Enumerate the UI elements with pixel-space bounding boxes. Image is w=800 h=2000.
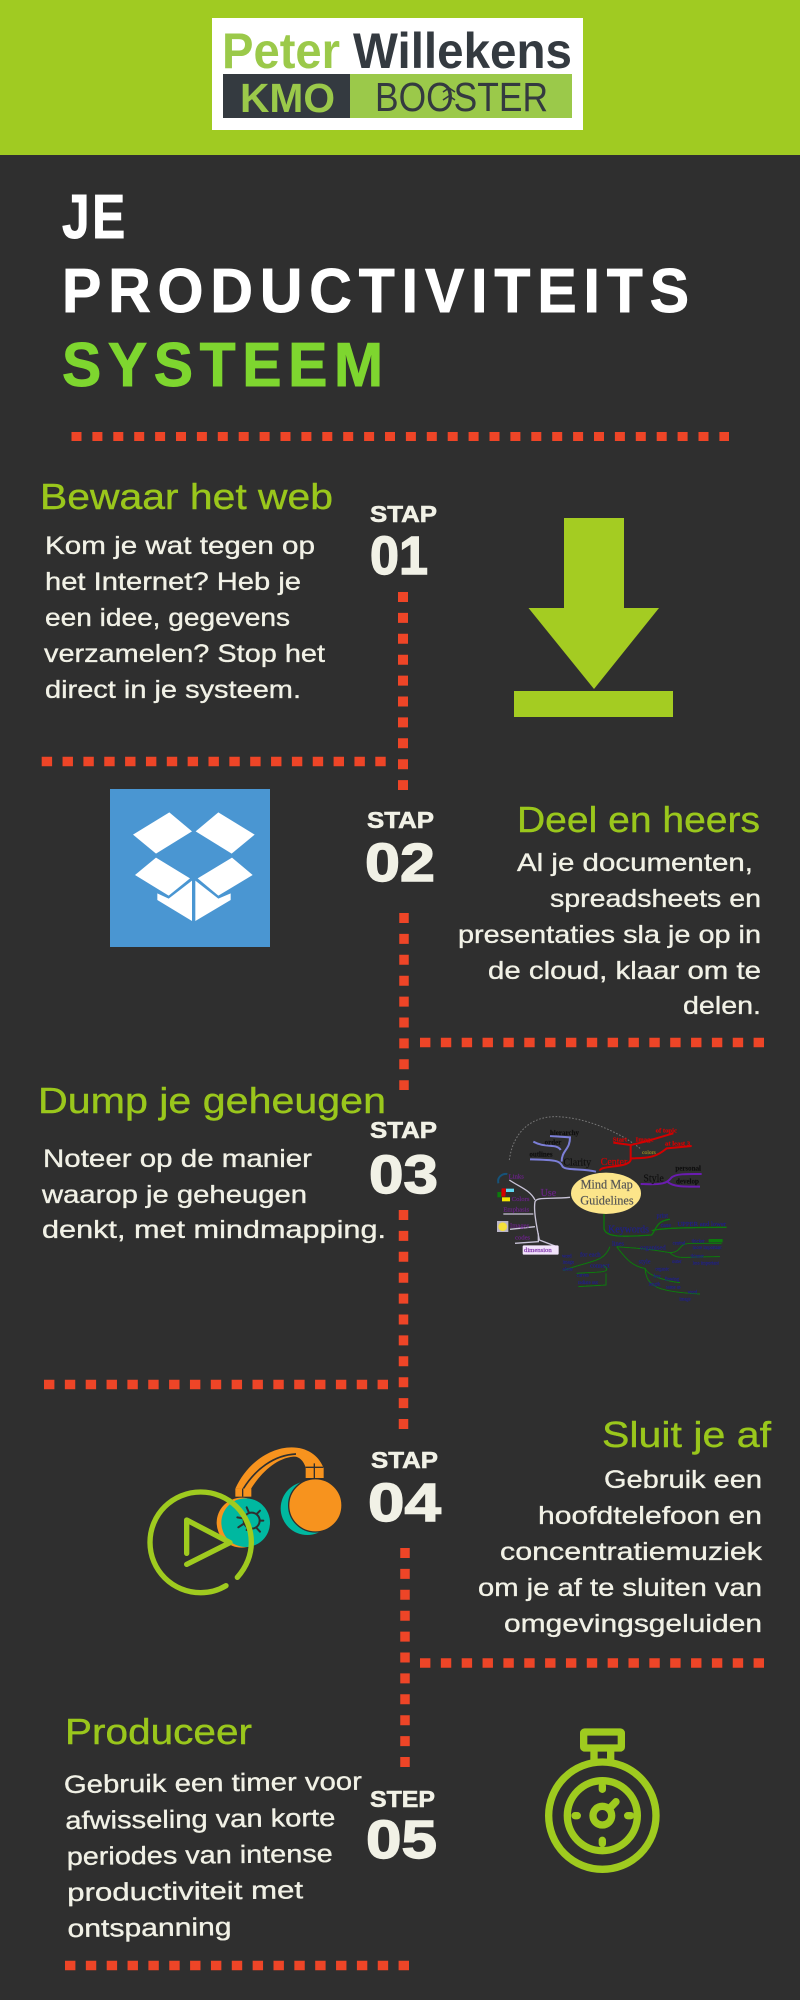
logo: Peter Willekens KMO Booster: Willekens: [353, 23, 572, 79]
text block: step 1 body: het Internet? Heb je: [45, 568, 301, 596]
chart: mind map guidelines: style: [639, 1259, 651, 1266]
chart: mind map guidelines: alone: [563, 1268, 573, 1273]
title: PRODUCTIVITEITS: [62, 256, 689, 325]
text block: step 5 body: ontspanning: [67, 1913, 232, 1943]
chart: mind map guidelines: free: [653, 1274, 661, 1279]
chart: mind map guidelines: codes: [515, 1234, 531, 1241]
step label 04: 04: [368, 1473, 441, 1533]
step label 02: [365, 807, 435, 893]
chart: mind map guidelines: personal: [675, 1164, 701, 1172]
step label 04: STAP: [371, 1447, 438, 1473]
step label 05: [366, 1786, 437, 1870]
text block: step 4 body: om je af te sluiten van: [478, 1574, 762, 1602]
chart: mind map guidelines: Emphasis: [503, 1207, 530, 1214]
text block: step 4 body: concentratiemuziek: [500, 1538, 763, 1566]
chart: mind map guidelines: thinner: [691, 1255, 704, 1260]
chart: mind map guidelines: curves: [577, 1273, 589, 1278]
text block: step 4 body: hoofdtelefoon en: [538, 1502, 762, 1530]
text block: step 5 body: Gebruik een timer voor: [64, 1768, 362, 1799]
logo: Peter Willekens KMO Booster: KMO: [240, 75, 335, 121]
chart: mind map guidelines: Image: [636, 1136, 653, 1143]
chart: mind map guidelines: develop: [676, 1178, 699, 1186]
step label 02: STAP: [367, 807, 434, 833]
chart: mind map guidelines: Center: [601, 1157, 628, 1168]
chart: mind map guidelines: length: [649, 1283, 661, 1288]
step label 02: 02: [365, 833, 435, 893]
icon: dropbox: [110, 789, 270, 947]
chart: mind map guidelines: same as: [666, 1286, 681, 1291]
step label 03: STAP: [370, 1117, 437, 1143]
chart: mind map guidelines: Colors: [512, 1196, 530, 1203]
text block: step 2 body: de cloud, klaar om te: [488, 957, 761, 985]
heading: Bewaar het web: Bewaar het web: [40, 476, 333, 517]
chart: mind map guidelines: radiate out: [578, 1281, 598, 1286]
text block: step 4 body: omgevingsgeluiden: [504, 1610, 762, 1638]
step label 03: 03: [369, 1145, 438, 1205]
chart: mind map guidelines: connect: [590, 1263, 610, 1270]
title: JE: [62, 182, 125, 251]
panel: step 4: [150, 1414, 772, 1638]
chart: mind map guidelines: dimension: [524, 1247, 552, 1254]
header band: [0, 0, 800, 155]
logo: Peter Willekens KMO Booster: BOOSTER: [375, 74, 548, 120]
heading: Sluit je af: Sluit je af: [602, 1414, 772, 1455]
chart: mind map guidelines: outlines: [529, 1151, 553, 1159]
step label 01: STAP: [370, 501, 437, 527]
panel: step 1: [40, 476, 673, 717]
chart: mind map guidelines: hierarchy: [550, 1129, 579, 1137]
chart: mind map guidelines: Keywords: [608, 1225, 649, 1236]
chart: mind map guidelines: word: [688, 1290, 698, 1295]
chart: mind map guidelines: Images: [510, 1222, 530, 1229]
text block: step 5 body: periodes van intense: [67, 1840, 333, 1871]
chart: mind map guidelines: of topic: [656, 1128, 677, 1135]
panel: step 3: [38, 1080, 727, 1303]
panel: step 2: [110, 789, 761, 1020]
text block: step 2 body: Al je documenten,: [517, 849, 753, 877]
text block: step 4 body: [478, 1466, 763, 1638]
text block: step 1 body: verzamelen? Stop het: [44, 640, 325, 668]
icon: stopwatch: [549, 1732, 656, 1869]
chart: mind map guidelines: print: [657, 1213, 668, 1219]
chart: mind map guidelines: for each: [580, 1252, 601, 1259]
chart: mind map guidelines: colors: [642, 1150, 656, 1156]
heading: Dump je geheugen: Dump je geheugen: [38, 1080, 386, 1121]
text block: step 3 body: [41, 1145, 386, 1244]
step label 01: [370, 501, 437, 586]
text block: step 3 body: waarop je geheugen: [41, 1181, 307, 1209]
chart: mind map guidelines: lines: [612, 1240, 624, 1247]
chart: mind map guidelines: word: [562, 1254, 572, 1259]
chart: mind map guidelines: Links: [509, 1174, 524, 1181]
chart: mind map guidelines: UPPER and lower: [677, 1221, 727, 1228]
text block: step 5 body: productiviteit met: [67, 1876, 303, 1907]
text block: step 2 body: presentaties sla je op in: [458, 921, 761, 949]
chart: mind map guidelines: less important: [693, 1262, 720, 1267]
chart: mind map guidelines: Mind Map: [580, 1177, 633, 1191]
step label 04: [368, 1447, 441, 1533]
text block: step 1 body: Kom je wat tegen op: [45, 532, 315, 560]
chart: mind map guidelines: more important: [693, 1246, 722, 1251]
chart: mind map guidelines: image: [679, 1298, 691, 1303]
text block: step 1 body: een idee, gegevens: [45, 604, 290, 632]
chart: mind map guidelines: [497, 1117, 727, 1303]
icon: download arrow: [514, 518, 673, 717]
heading: Produceer: Produceer: [65, 1711, 252, 1752]
logo: Peter Willekens KMO Booster: Peter: [222, 23, 340, 79]
text block: step 5 body: afwisseling van korte: [65, 1804, 335, 1835]
chart: mind map guidelines: image: [563, 1261, 574, 1266]
chart: mind map guidelines: organised: [640, 1244, 666, 1251]
text block: step 2 body: delen.: [683, 992, 761, 1020]
text block: step 1 body: direct in je systeem.: [45, 676, 301, 704]
step label 01: 01: [370, 526, 428, 586]
chart: mind map guidelines: Guidelines: [580, 1193, 634, 1207]
text block: step 5 body: [64, 1768, 364, 1943]
icon: headphones and play button: [150, 1447, 342, 1593]
chart: mind map guidelines: outer: [672, 1260, 682, 1265]
chart: mind map guidelines: case: [661, 1223, 671, 1229]
step label 03: [369, 1117, 438, 1205]
text block: step 1 body: [44, 532, 325, 704]
title: SYSTEEM: [62, 330, 383, 399]
text block: step 3 body: Noteer op de manier: [43, 1145, 312, 1173]
text block: step 2 body: [458, 849, 761, 1020]
text block: step 2 body: spreadsheets en: [550, 885, 761, 913]
chart: mind map guidelines: thicker: [692, 1239, 705, 1244]
title: [62, 182, 689, 399]
chart: mind map guidelines: flowing: [665, 1277, 680, 1282]
chart: mind map guidelines: Use: [541, 1188, 557, 1199]
text block: step 3 body: denkt, met mindmapping.: [42, 1216, 386, 1244]
chart: mind map guidelines: central: [673, 1242, 686, 1247]
chart: mind map guidelines: Start: [613, 1136, 628, 1143]
chart: mind map guidelines: at least 3: [665, 1140, 691, 1147]
text block: step 4 body: Gebruik een: [604, 1466, 762, 1494]
chart: mind map guidelines: order: [545, 1138, 561, 1146]
step label 05: 05: [366, 1810, 437, 1870]
panel: step 5: [64, 1711, 656, 1943]
heading: Deel en heers: Deel en heers: [517, 799, 760, 840]
chart: mind map guidelines: Clarity: [563, 1158, 591, 1169]
logo: Peter Willekens KMO Booster: [212, 18, 583, 130]
step label 05: STEP: [370, 1786, 435, 1812]
chart: mind map guidelines: organic: [655, 1268, 669, 1273]
chart: mind map guidelines: Style: [643, 1173, 664, 1184]
